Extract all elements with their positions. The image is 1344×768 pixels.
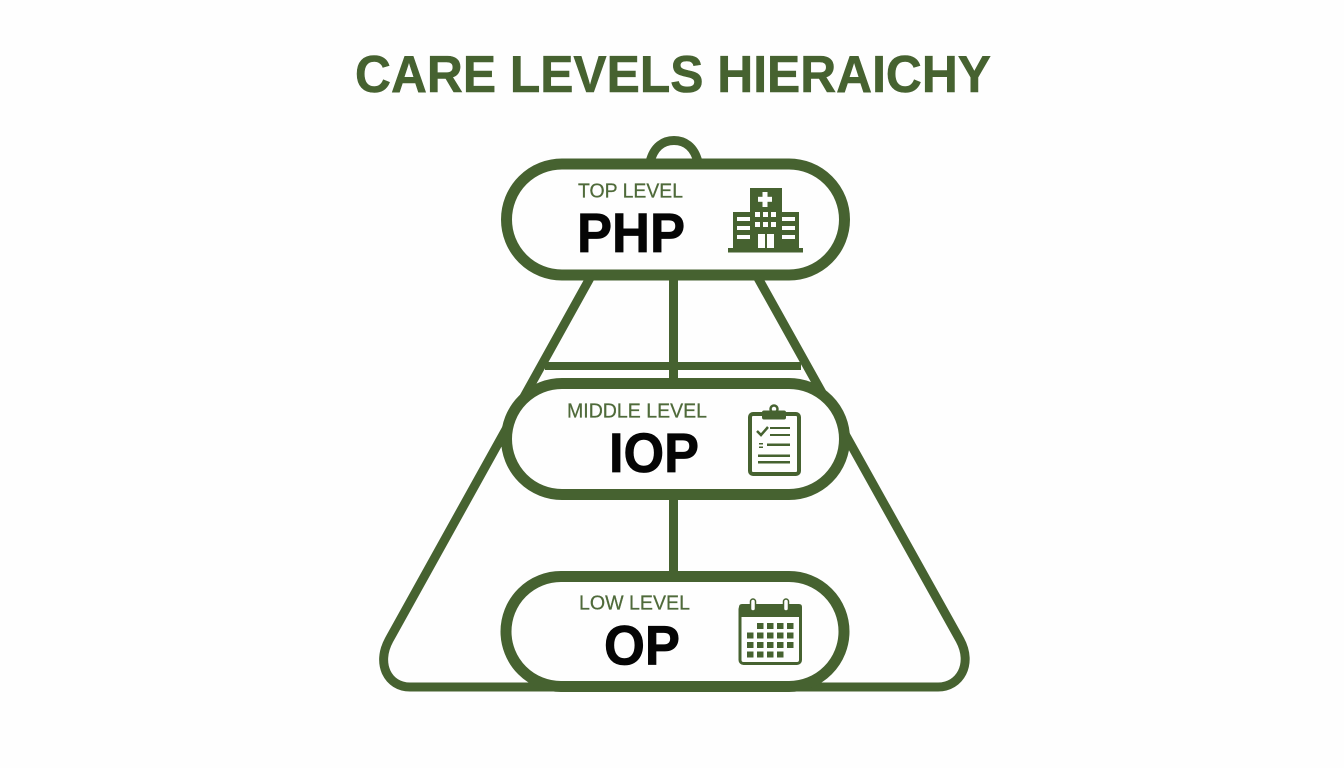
- IOP: IOP: [609, 421, 699, 484]
- pyramid outline: [384, 278, 965, 687]
- icon: hospital: [728, 188, 803, 252]
- OP: OP: [604, 614, 680, 676]
- top level label: TOP LEVEL: [578, 180, 683, 202]
- crossbar: [545, 362, 801, 370]
- icon: clipboard: [750, 406, 799, 474]
- panel: middle level: [506, 384, 844, 494]
- panel: top level: [506, 164, 844, 275]
- connector: middle to low: [669, 495, 678, 575]
- icon: calendar: [739, 599, 802, 664]
- connector: top to middle: [669, 275, 678, 383]
- panel: low level: [506, 576, 844, 686]
- PHP: PHP: [577, 201, 685, 264]
- low level label: LOW LEVEL: [579, 592, 690, 614]
- top loop: [650, 140, 698, 162]
- title: CARE LEVELS HIERAICHY: [355, 46, 991, 104]
- middle level label: MIDDLE LEVEL: [567, 400, 707, 422]
